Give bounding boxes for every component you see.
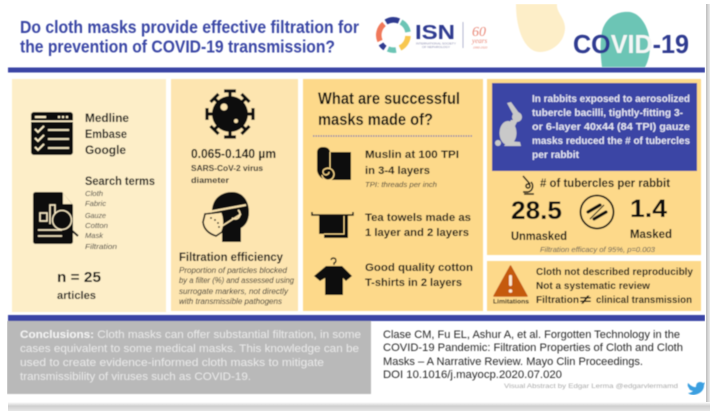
panel: limitations xyxy=(487,261,701,311)
database list: Google xyxy=(85,143,126,157)
stat: unmasked: Unmasked xyxy=(511,229,567,243)
60 years mark: 60 xyxy=(472,25,486,40)
icon: document search xyxy=(33,192,78,244)
logo subtitle: OF NEPHROLOGY xyxy=(422,45,450,49)
panel: search strategy xyxy=(12,79,166,312)
limitations list: Cloth not described reproducibly xyxy=(536,266,693,278)
material: muslin: in 3-4 layers xyxy=(365,165,430,177)
citation: DOI 10.1016/j.mayocp.2020.07.020 xyxy=(383,369,562,381)
credit: Visual Abstract by Edgar Lerma @edgarvlermamd xyxy=(504,383,678,390)
logo wordmark: ISN xyxy=(415,22,455,44)
panel: conclusions: Conclusions: Cloth masks can offer substantial filtration, in some xyxy=(20,329,361,341)
virus size: 0.065-0.140 µm xyxy=(191,147,276,161)
article count xyxy=(57,269,101,302)
filtration efficiency heading: Filtration efficiency xyxy=(179,250,283,264)
material: muslin xyxy=(365,149,459,189)
limitations list xyxy=(536,266,693,307)
citation: Masks – A Narrative Review. Mayo Clin Proceedings. xyxy=(383,356,643,368)
filtration efficacy note: Filtration efficacy of 95%, p=0.003 xyxy=(540,245,656,254)
search terms list: Mask xyxy=(85,231,104,240)
material: cotton t-shirts: T-shirts in 2 layers xyxy=(365,277,462,289)
panel: conclusions xyxy=(7,321,371,394)
icon: masked head xyxy=(203,192,249,242)
material: muslin: TPI: threads per inch xyxy=(365,182,437,189)
filtration definition: Proportion of particles blocked xyxy=(179,266,288,275)
search terms list: Filtration xyxy=(85,242,117,251)
icon: rabbit xyxy=(495,102,522,146)
panel: conclusions: used to create evidence-informed cloth masks to mitigate xyxy=(20,357,324,369)
study summary box xyxy=(492,83,697,171)
logo subtitle xyxy=(416,42,456,49)
teal blob xyxy=(601,12,650,67)
icon: twitter bird xyxy=(688,382,705,395)
logo subtitle: INTERNATIONAL SOCIETY xyxy=(416,42,456,46)
search terms heading: Search terms xyxy=(85,174,155,188)
limitations list: Filtration xyxy=(536,294,579,306)
panel heading: What are successful xyxy=(318,89,460,108)
filtration definition xyxy=(179,266,295,306)
search terms list: Cotton xyxy=(85,221,108,230)
title xyxy=(20,17,359,56)
search terms list xyxy=(85,189,117,251)
logo ring xyxy=(379,20,408,50)
search terms list: Cloth xyxy=(85,189,103,198)
article count: articles xyxy=(57,290,96,302)
COVID-19 wordmark: COVID-19 xyxy=(573,31,689,59)
stat: unmasked xyxy=(511,197,567,243)
cream blob xyxy=(516,4,565,52)
icon: t-shirt on hanger xyxy=(314,258,352,295)
filtration definition: surrogate markers, not directly xyxy=(179,287,289,296)
limitations label: Limitations xyxy=(493,298,529,306)
icon: virus xyxy=(207,91,253,137)
material: tea towels: 1 layer and 2 layers xyxy=(365,227,469,239)
citation xyxy=(383,329,683,381)
title: the prevention of COVID-19 transmission? xyxy=(20,36,335,56)
chart heading: # of tubercles per rabbit xyxy=(540,178,670,190)
material: cotton t-shirts xyxy=(365,262,473,289)
top rule xyxy=(8,68,705,72)
study summary text: per rabbit xyxy=(532,150,580,161)
material: tea towels xyxy=(365,212,471,239)
icon: fabric roll xyxy=(317,147,351,180)
panel: mask materials xyxy=(303,79,483,311)
60 years mark: 1960-2020 xyxy=(473,46,488,50)
material: muslin: Muslin at 100 TPI xyxy=(365,149,459,161)
search terms list: Fabric xyxy=(85,199,106,208)
article count: n = 25 xyxy=(57,269,101,286)
citation: COVID-19 Pandemic: Filtration Properties of Cloth and Cloth xyxy=(383,342,683,354)
study summary text: or 6-layer 40x44 (84 TPI) gauze xyxy=(532,122,691,133)
ISN logo xyxy=(379,20,488,50)
icon: towel on rail xyxy=(312,212,353,238)
material: cotton t-shirts: Good quality cotton xyxy=(365,262,473,274)
limitations list: ≠ xyxy=(580,292,591,307)
icon: browser checklist xyxy=(31,112,73,155)
study summary text: In rabbits exposed to aerosolized xyxy=(532,94,690,105)
panel: conclusions: transmissibility of viruses such as COVID-19. xyxy=(20,371,251,383)
database list: Medline xyxy=(85,111,129,125)
database list: Embase xyxy=(85,127,127,141)
citation: Clase CM, Fu EL, Ashur A, et al. Forgotten Technology in the xyxy=(383,329,680,341)
study summary text: masks reduced the # of tubercles xyxy=(532,136,691,147)
panel heading: masks made of? xyxy=(318,110,433,129)
limitations list: clinical transmission xyxy=(596,294,692,306)
stat: masked: Masked xyxy=(630,227,672,241)
study summary text: tubercle bacilli, tightly-fitting 3- xyxy=(532,108,683,119)
virus size caption: diameter xyxy=(191,175,230,185)
stat: masked xyxy=(630,195,672,241)
panel: virus and filtration xyxy=(171,79,298,311)
study summary text xyxy=(532,94,691,161)
COVID-19 badge xyxy=(516,4,689,67)
panel heading xyxy=(318,89,460,129)
database list xyxy=(85,111,129,157)
material: tea towels: Tea towels made as xyxy=(365,212,471,224)
limitations list: Not a systematic review xyxy=(536,280,651,292)
60 years mark xyxy=(471,25,488,50)
icon: warning triangle xyxy=(494,266,527,296)
virus size caption xyxy=(191,163,263,185)
bottom rule xyxy=(8,315,705,321)
virus size caption: SARS-CoV-2 virus xyxy=(191,163,263,173)
panel: rabbit study xyxy=(487,79,701,255)
stat: masked: 1.4 xyxy=(630,195,667,223)
title: Do cloth masks provide effective filtration for xyxy=(20,17,359,37)
60 years mark: years xyxy=(471,37,487,45)
filtration definition: with transmissible pathogens xyxy=(179,297,282,306)
panel: conclusions: cases equivalent to some medical masks. This knowledge can be xyxy=(20,343,359,355)
filtration definition: by a filter (%) and assessed using xyxy=(179,276,295,285)
search terms list: Gauze xyxy=(85,211,106,220)
icon: microscope xyxy=(523,176,534,194)
stat: unmasked: 28.5 xyxy=(511,197,562,225)
icon: not-equal circle xyxy=(580,196,614,228)
